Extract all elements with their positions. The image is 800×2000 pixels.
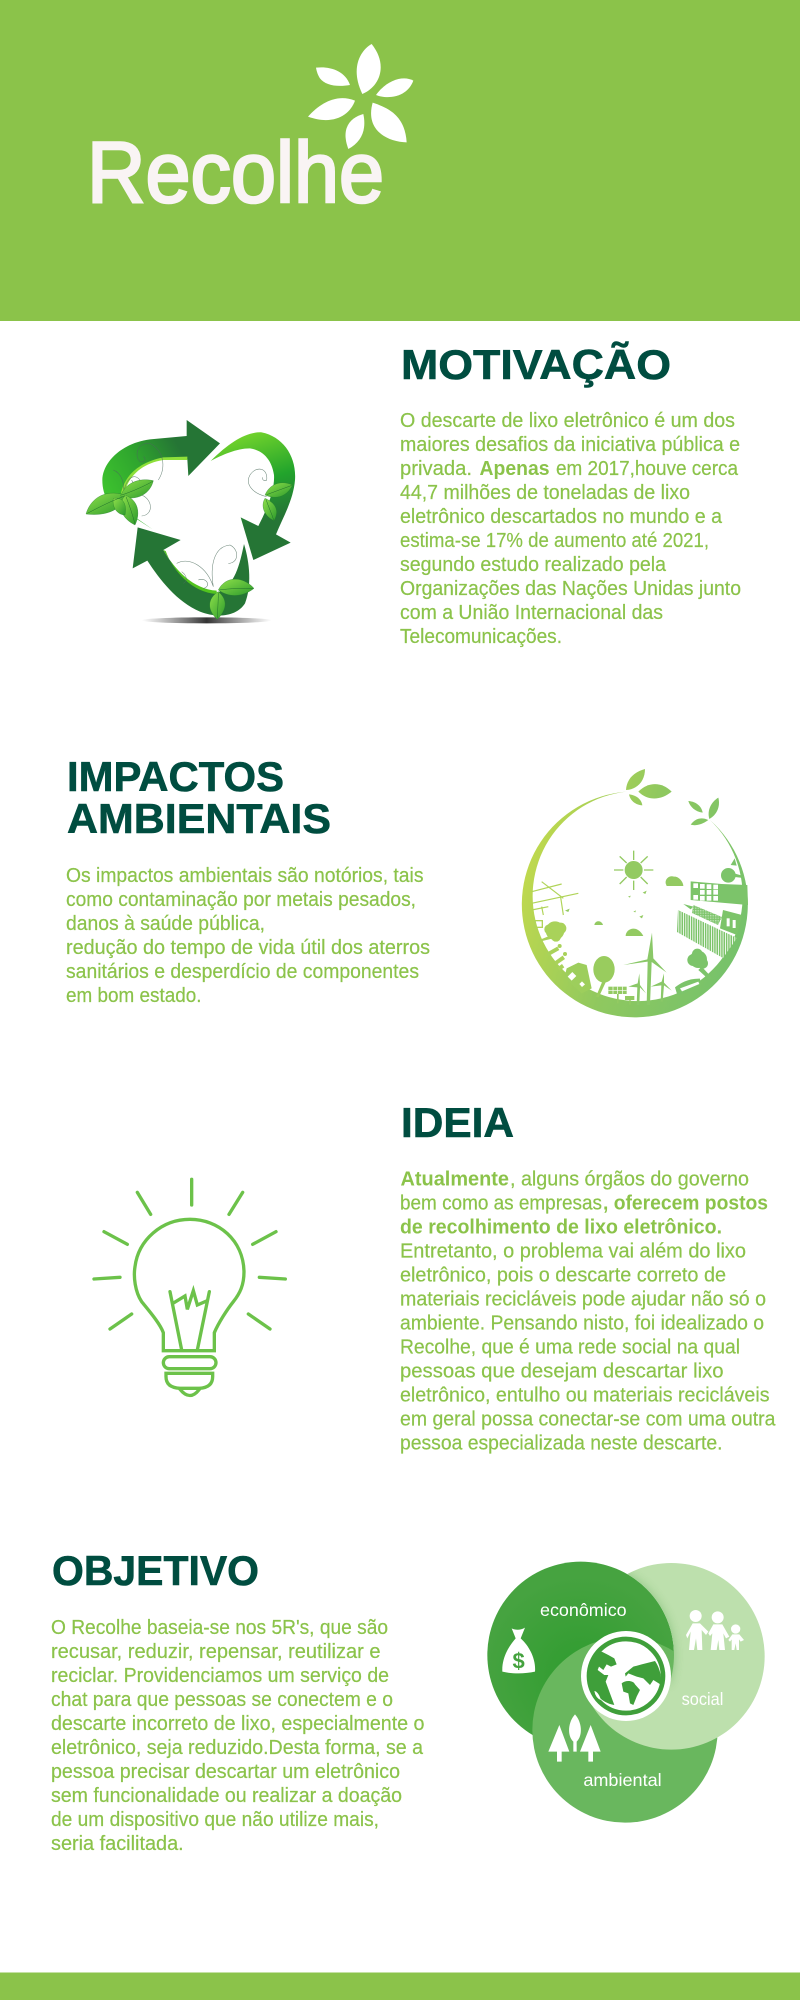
- text block: objetivo: recusar, reduzir, repensar, reutilizar e: [51, 1641, 380, 1663]
- text block: impactos: [66, 865, 430, 1007]
- text block: impactos: redução do tempo de vida útil dos aterros: [66, 937, 430, 959]
- heading: ideia: IDEIA: [401, 1099, 514, 1146]
- text block: impactos: Os impactos ambientais são notórios, tais: [66, 865, 424, 887]
- text block: motivação: com a União Internacional das: [400, 602, 663, 624]
- text block: motivação: Apenas: [480, 458, 550, 480]
- text block: motivação: estima-se 17% de aumento até 2021,: [400, 530, 709, 552]
- text block: ideia: [400, 1168, 776, 1454]
- logo flower icon: [308, 44, 413, 149]
- text block: motivação: Organizações das Nações Unidas junto: [400, 578, 741, 600]
- chart: three-circle venn diagram: $: [513, 1648, 525, 1673]
- text block: objetivo: sem funcionalidade ou realizar a doação: [51, 1785, 402, 1807]
- text block: ideia: Recolhe, que é uma rede social na qual: [400, 1336, 740, 1358]
- panel: motivação: [86, 341, 741, 648]
- text block: objetivo: pessoa precisar descartar um eletrônico: [51, 1761, 400, 1783]
- text block: ideia: , alguns órgãos do governo: [510, 1168, 749, 1190]
- header band: [0, 0, 800, 321]
- heading: impactos ambientais: AMBIENTAIS: [67, 795, 331, 842]
- icon: recycling arrows with leaves: [86, 420, 295, 623]
- heading: objetivo: OBJETIVO: [52, 1547, 259, 1594]
- text block: impactos: danos à saúde pública,: [66, 913, 265, 935]
- footer band: [0, 1972, 800, 2000]
- icon: light bulb: [94, 1179, 285, 1395]
- text block: ideia: eletrônico, entulho ou materiais recicláveis: [400, 1384, 770, 1406]
- text block: motivação: O descarte de lixo eletrônico é um dos: [400, 410, 735, 432]
- text block: motivação: 44,7 milhões de toneladas de lixo: [400, 482, 690, 504]
- heading: motivação: MOTIVAÇÃO: [401, 341, 671, 388]
- text block: objetivo: O Recolhe baseia-se nos 5R's, que são: [51, 1617, 388, 1639]
- icon: family: [686, 1610, 744, 1650]
- text block: motivação: privada.: [400, 458, 472, 480]
- text block: ideia: em geral possa conectar-se com uma outra: [400, 1408, 776, 1430]
- text block: ideia: materiais recicláveis pode ajudar não só o: [400, 1288, 766, 1310]
- text block: objetivo: [51, 1617, 424, 1855]
- text block: motivação: [400, 410, 741, 648]
- text block: ideia: , oferecem postos: [603, 1192, 768, 1214]
- icon: green city circle: [522, 769, 748, 1017]
- text block: ideia: Atualmente: [400, 1168, 509, 1190]
- label: ambiental: ambiental: [583, 1770, 662, 1790]
- icon: globe: [581, 1631, 671, 1721]
- text block: objetivo: chat para que pessoas se conectem e o: [51, 1689, 393, 1711]
- text block: objetivo: descarte incorreto de lixo, especialmente o: [51, 1713, 424, 1735]
- text block: impactos: como contaminação por metais pesados,: [66, 889, 416, 911]
- panel: impactos ambientais: [66, 753, 748, 1017]
- text block: objetivo: reciclar. Providenciamos um serviço de: [51, 1665, 389, 1687]
- sun and clouds: [565, 851, 683, 936]
- text block: motivação: segundo estudo realizado pela: [400, 554, 667, 576]
- text block: ideia: de recolhimento de lixo eletrônico.: [400, 1216, 722, 1238]
- text block: objetivo: eletrônico, seja reduzido.Desta forma, se a: [51, 1737, 424, 1759]
- left city silhouettes: [532, 882, 634, 1005]
- wind turbines: [623, 933, 672, 1005]
- text block: ideia: eletrônico, pois o descarte correto de: [400, 1264, 726, 1286]
- text block: impactos: em bom estado.: [66, 985, 202, 1007]
- text block: objetivo: de um dispositivo que não utilize mais,: [51, 1809, 379, 1831]
- text block: ideia: Entretanto, o problema vai além do lixo: [400, 1240, 746, 1262]
- logo: Recolhe: [87, 44, 413, 221]
- icon: money bag: [502, 1628, 535, 1673]
- right city silhouettes: [675, 858, 748, 995]
- text block: ideia: pessoas que desejam descartar lixo: [400, 1360, 724, 1382]
- text block: motivação: em 2017,houve cerca: [556, 458, 739, 480]
- text block: motivação: eletrônico descartados no mundo e a: [400, 506, 723, 528]
- text block: ideia: bem como as empresas: [400, 1192, 602, 1214]
- icon: trees: [548, 1714, 601, 1762]
- text block: motivação: Telecomunicações.: [400, 626, 562, 648]
- label: social: social: [682, 1689, 723, 1709]
- text block: objetivo: seria facilitada.: [51, 1833, 184, 1855]
- chart: three-circle venn diagram: [487, 1562, 765, 1823]
- logo wordmark: Recolhe: [87, 125, 384, 221]
- text block: motivação: maiores desafios da iniciativa pública e: [400, 434, 740, 456]
- text block: impactos: sanitários e desperdício de componentes: [66, 961, 419, 983]
- heading: impactos ambientais: [67, 753, 331, 842]
- panel: ideia: [94, 1099, 776, 1454]
- panel: objetivo: [51, 1547, 765, 1855]
- text block: ideia: pessoa especializada neste descarte.: [400, 1432, 722, 1454]
- label: econômico: econômico: [540, 1600, 627, 1620]
- heading: impactos ambientais: IMPACTOS: [67, 753, 284, 800]
- text block: ideia: ambiente. Pensando nisto, foi idealizado o: [400, 1312, 764, 1334]
